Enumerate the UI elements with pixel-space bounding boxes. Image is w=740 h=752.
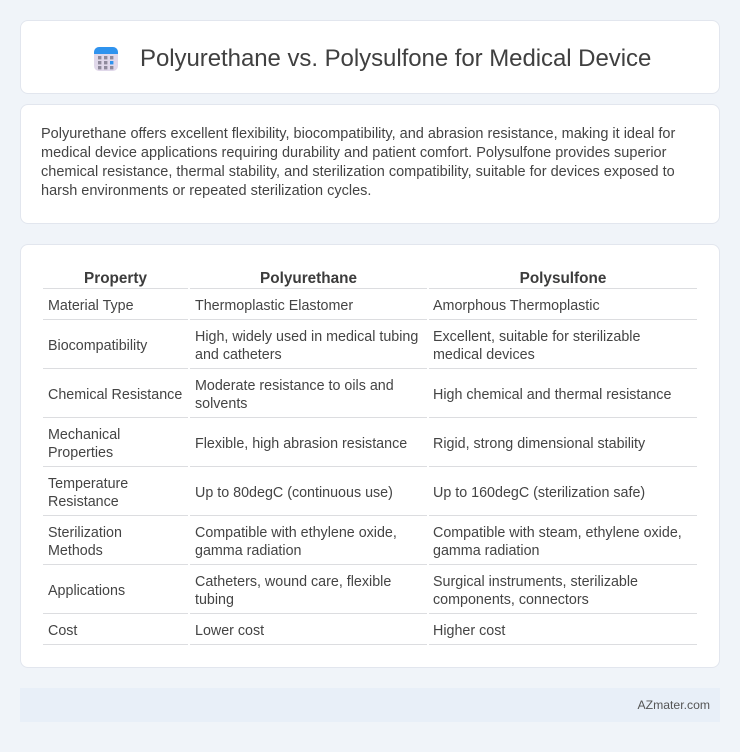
row: material type: Material Type — [48, 298, 134, 314]
row: cost — [48, 623, 506, 639]
row: cost: Higher cost — [433, 623, 505, 639]
row: material type: Amorphous Thermoplastic — [433, 298, 600, 314]
row: applications: Applications — [48, 583, 125, 599]
row: mechanical properties: Properties — [48, 445, 113, 461]
row: mechanical properties: Flexible, high abrasion resistance — [195, 436, 407, 452]
row: temperature resistance — [48, 476, 645, 510]
intro text: harsh environments or repeated sterilization cycles. — [41, 183, 371, 199]
row: material type: Thermoplastic Elastomer — [195, 298, 353, 314]
footer credit: AZmater.com — [638, 698, 710, 712]
intro text — [41, 126, 676, 199]
intro text: medical device applications requiring durability and patient comfort. Polysulfone provides superior — [41, 145, 666, 161]
row: mechanical properties: Mechanical — [48, 427, 120, 443]
row: cost: Cost — [48, 623, 77, 639]
row: temperature resistance: Up to 160degC (sterilization safe) — [433, 485, 645, 501]
row: sterilization methods: gamma radiation — [195, 543, 302, 559]
row: sterilization methods — [48, 525, 682, 559]
row: biocompatibility: Biocompatibility — [48, 338, 147, 354]
header row: Property — [84, 270, 147, 287]
row: mechanical properties: Rigid, strong dimensional stability — [433, 436, 645, 452]
row: applications: components, connectors — [433, 592, 589, 608]
row: applications — [48, 574, 638, 608]
header row: Polyurethane — [260, 270, 357, 287]
intro text: chemical resistance, thermal stability, and sterilization compatibility, suitable for devices exposed to — [41, 164, 675, 180]
row: temperature resistance: Temperature — [48, 476, 128, 492]
row: applications: Catheters, wound care, flexible — [195, 574, 391, 590]
title: Polyurethane vs. Polysulfone for Medical Device — [140, 45, 651, 72]
header row — [84, 270, 606, 287]
row: sterilization methods: Methods — [48, 543, 103, 559]
row: temperature resistance: Up to 80degC (continuous use) — [195, 485, 393, 501]
row: biocompatibility: and catheters — [195, 347, 282, 363]
row: applications: Surgical instruments, sterilizable — [433, 574, 638, 590]
intro text: Polyurethane offers excellent flexibility, biocompatibility, and abrasion resistance, making it ideal for — [41, 126, 675, 142]
row: chemical resistance: Moderate resistance to oils and — [195, 378, 394, 394]
icon: calendar — [94, 47, 118, 71]
row: applications: tubing — [195, 592, 234, 608]
row: biocompatibility: medical devices — [433, 347, 535, 363]
header row: Polysulfone — [520, 270, 606, 287]
table panel — [20, 244, 720, 668]
title panel — [20, 20, 720, 94]
row: sterilization methods: Compatible with ethylene oxide, — [195, 525, 397, 541]
row: biocompatibility — [48, 329, 640, 363]
row: sterilization methods: gamma radiation — [433, 543, 540, 559]
row: chemical resistance: Chemical Resistance — [48, 387, 182, 403]
row: biocompatibility: Excellent, suitable for sterilizable — [433, 329, 640, 345]
row: material type — [48, 298, 600, 314]
row: chemical resistance: solvents — [195, 396, 247, 412]
intro panel — [20, 104, 720, 224]
row: mechanical properties — [48, 427, 646, 461]
row: sterilization methods: Sterilization — [48, 525, 122, 541]
row: chemical resistance — [48, 378, 671, 412]
footer bar — [20, 688, 720, 722]
row: chemical resistance: High chemical and thermal resistance — [433, 387, 671, 403]
row: biocompatibility: High, widely used in medical tubing — [195, 329, 418, 345]
row: temperature resistance: Resistance — [48, 494, 119, 510]
row: cost: Lower cost — [195, 623, 264, 639]
row: sterilization methods: Compatible with steam, ethylene oxide, — [433, 525, 682, 541]
